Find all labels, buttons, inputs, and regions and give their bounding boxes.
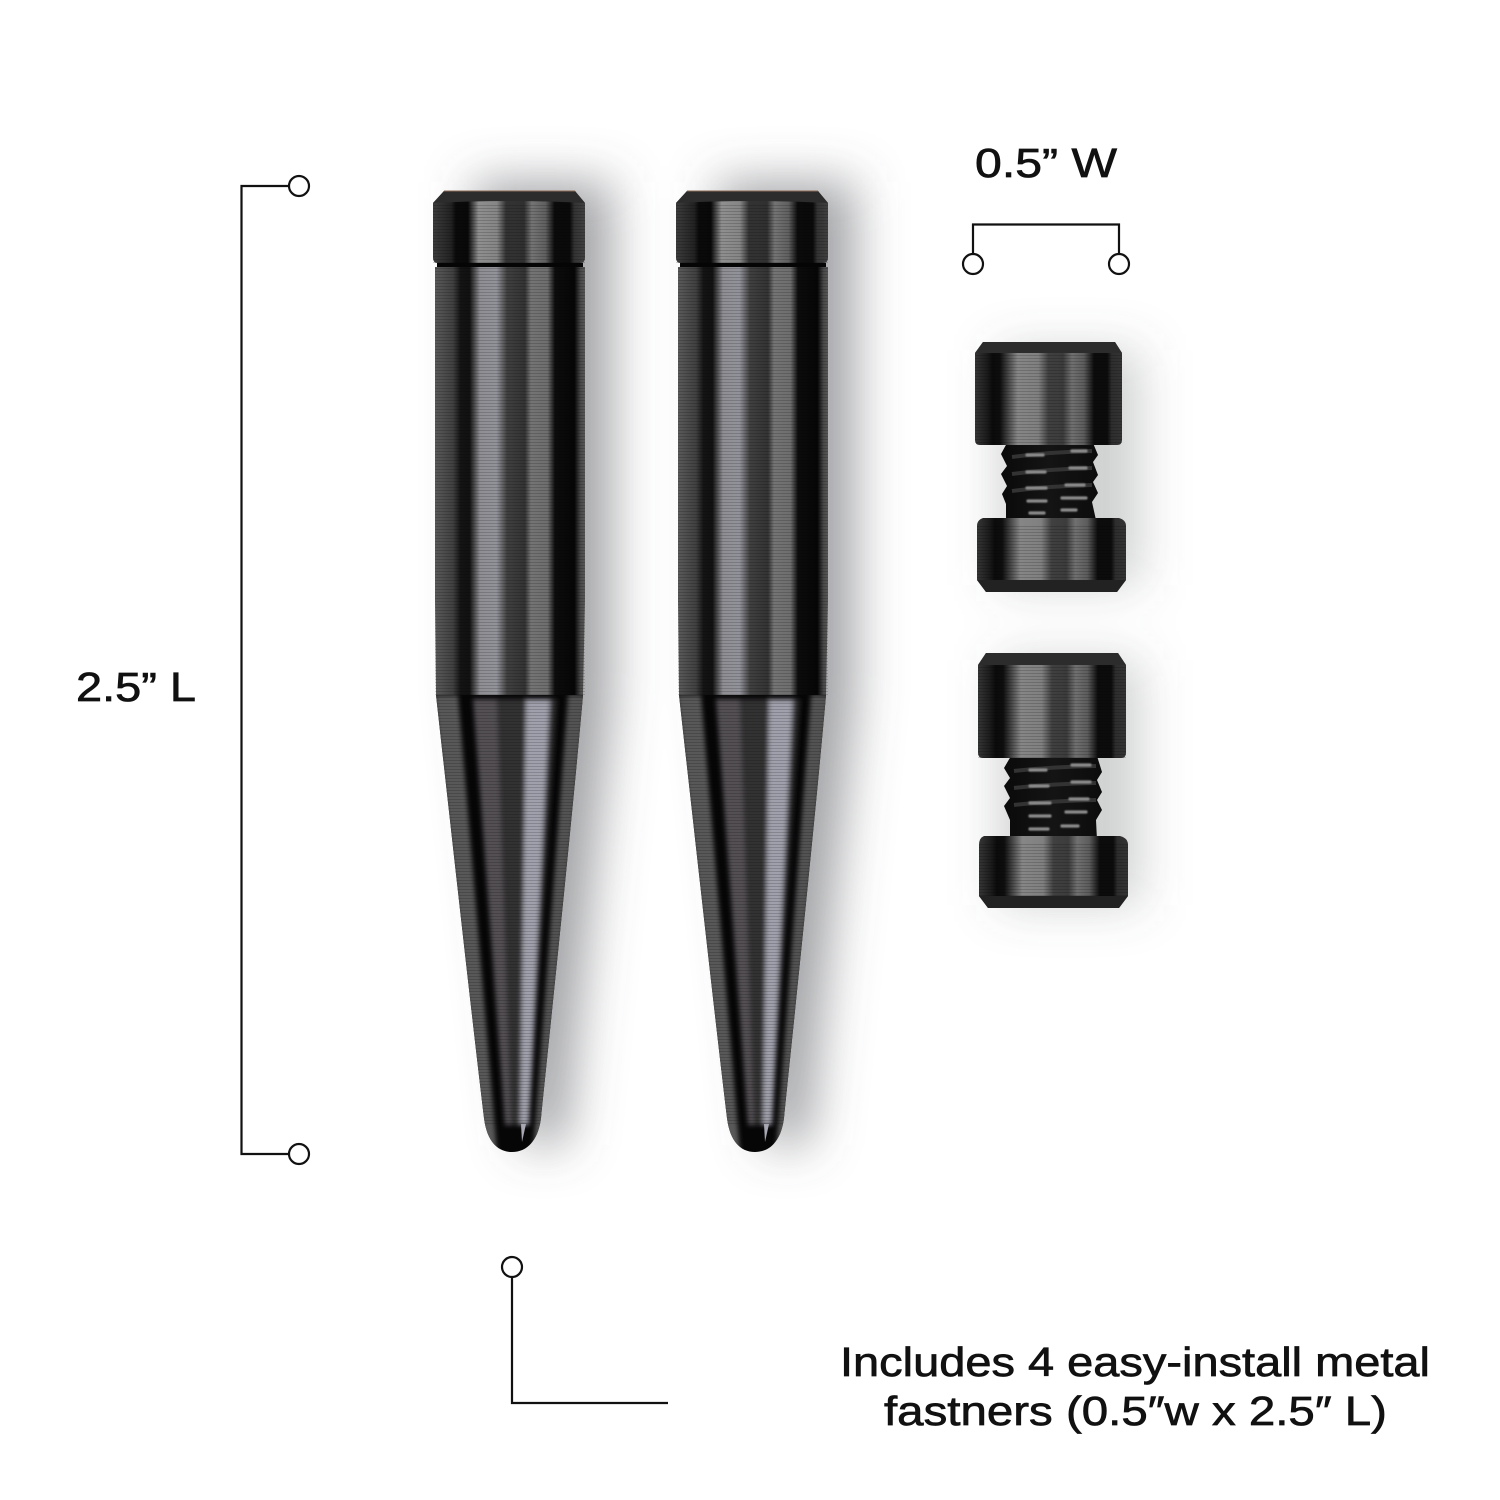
fastener 2 upper nut [978, 653, 1126, 758]
spike tapered tip [430, 695, 590, 1155]
length label: 2.5” L [76, 664, 196, 710]
fastener 1 lower nut [977, 518, 1126, 592]
fastener callout leader line [502, 1257, 668, 1403]
fastener callout text [840, 1339, 1430, 1434]
spike cylinder body [435, 267, 585, 695]
width label: 0.5” W [975, 140, 1117, 186]
fastener 2 [978, 653, 1128, 908]
spike 1 [430, 191, 590, 1155]
fastener 1 thread [1001, 443, 1098, 520]
fastener 1 upper nut [975, 342, 1122, 445]
fastener callout text: Includes 4 easy-install metal [840, 1339, 1430, 1385]
infographic canvas [78, 148, 1428, 1434]
spike cap [433, 191, 585, 267]
width dimension bracket [963, 224, 1129, 274]
spike shadows [474, 182, 1140, 1145]
fastener callout text: fastners (0.5″w x 2.5″ L) [884, 1388, 1387, 1434]
length dimension bracket [242, 176, 309, 1164]
fastener 1 [975, 342, 1126, 592]
fastener 2 lower nut [979, 836, 1128, 908]
fastener 2 thread [1004, 756, 1102, 840]
spike 2 [673, 191, 833, 1155]
